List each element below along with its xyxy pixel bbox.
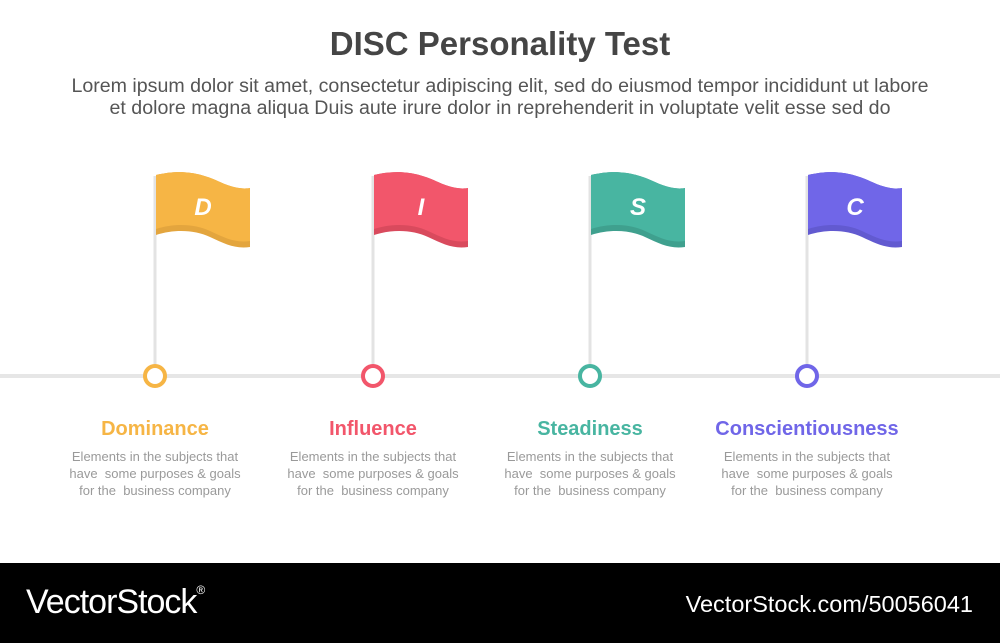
desc: Steadiness: have some purposes & goals bbox=[504, 466, 676, 481]
desc: Steadiness bbox=[504, 449, 676, 498]
flag S: S bbox=[630, 194, 646, 221]
desc: Dominance: have some purposes & goals bbox=[69, 466, 241, 481]
subtitle: et dolore magna aliqua Duis aute irure dolor in reprehenderit in voluptate velit esse sed do bbox=[110, 97, 890, 119]
desc: Conscientiousness: have some purposes & goals bbox=[721, 466, 893, 481]
label: Influence: Influence bbox=[329, 418, 417, 440]
desc: Dominance: for the business company bbox=[79, 483, 231, 498]
flag S bbox=[580, 172, 685, 386]
desc: Influence: for the business company bbox=[297, 483, 449, 498]
flag D: D bbox=[194, 194, 212, 221]
flag C bbox=[797, 172, 902, 386]
desc: Conscientiousness: for the business company bbox=[731, 483, 883, 498]
desc: Dominance: Elements in the subjects that bbox=[72, 449, 238, 464]
desc: Influence bbox=[287, 449, 459, 498]
desc: Steadiness: Elements in the subjects that bbox=[507, 449, 673, 464]
flag C: C bbox=[846, 194, 864, 221]
label: Conscientiousness: Conscientiousness bbox=[715, 418, 899, 440]
subtitle bbox=[71, 75, 929, 119]
footer logo: VectorStock® bbox=[26, 583, 204, 621]
desc: Influence: have some purposes & goals bbox=[287, 466, 459, 481]
footer bar bbox=[0, 563, 1000, 643]
desc: Dominance bbox=[69, 449, 241, 498]
footer url: VectorStock.com/50056041 bbox=[686, 591, 973, 617]
desc: Influence: Elements in the subjects that bbox=[290, 449, 456, 464]
label: Steadiness: Steadiness bbox=[537, 418, 643, 440]
title: DISC Personality Test bbox=[330, 25, 670, 62]
desc: Conscientiousness: Elements in the subjects that bbox=[724, 449, 890, 464]
flag D bbox=[145, 172, 250, 386]
desc: Conscientiousness bbox=[721, 449, 893, 498]
desc: Steadiness: for the business company bbox=[514, 483, 666, 498]
flag I: I bbox=[418, 194, 426, 221]
label: Dominance: Dominance bbox=[101, 418, 209, 440]
subtitle: Lorem ipsum dolor sit amet, consectetur adipiscing elit, sed do eiusmod tempor incididunt ut labore bbox=[71, 75, 929, 97]
flag I bbox=[363, 172, 468, 386]
